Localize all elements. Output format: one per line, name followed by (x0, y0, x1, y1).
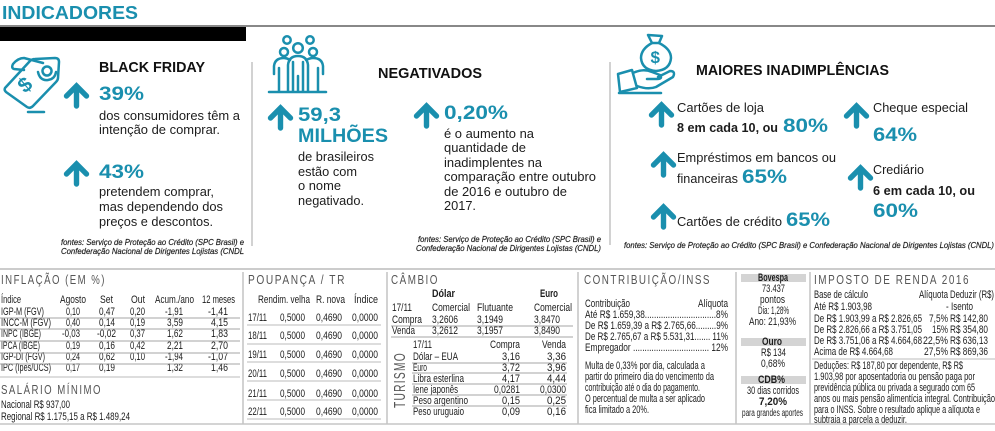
table: câmbio comercial: 3,2606 (432, 314, 458, 326)
item: cartões de loja: 80% (783, 116, 828, 137)
table rows: 0,19 (66, 340, 80, 352)
text: 0,20% description: inadimplentes na (444, 155, 543, 170)
text: multa note: partir do primeiro dia do vencimento da (585, 371, 714, 383)
arrow: up 0,20% (416, 106, 436, 126)
table rows: IGP-M (FGV) (1, 306, 44, 318)
source note: fontes: Serviço de Proteção ao Crédito (SPC Brasil) e (418, 234, 601, 244)
table rows (1, 306, 228, 374)
table: turismo: 0,0300 (540, 384, 566, 396)
table rows: 19/11 (248, 349, 267, 361)
table rows: 0,20 (130, 306, 145, 318)
panel: contribuição inss (584, 272, 729, 416)
table rows: 0,40 (66, 317, 80, 329)
table: alíquotas (585, 298, 729, 354)
table rows: 0,17 (66, 362, 80, 374)
table rows: IPC (Ipes/UCS) (1, 362, 51, 374)
table: turismo: 0,09 (502, 406, 520, 418)
table: alíquotas ir: 22,5% (923, 335, 948, 347)
table: alíquotas ir: De R$ 3.751,06 a R$ 4.664,68 (814, 335, 922, 347)
table rows: 0,10 (130, 351, 145, 363)
table rows: 0,5000 (280, 406, 305, 418)
text: multa note (585, 360, 714, 416)
table header (1, 293, 235, 306)
text: 0,20% description (444, 126, 596, 213)
table rows: -1,94 (165, 351, 183, 363)
item: cartões de crédito: Cartões de crédito (677, 214, 782, 229)
block: ouro (741, 336, 806, 370)
table header: Out (131, 294, 146, 306)
text: multa note: contribuição até o dia do pagamento. (585, 382, 700, 394)
table rows: 2,70 (211, 340, 228, 352)
table: câmbio comercial: Euro (540, 288, 558, 300)
text: 0,20% description: de 2016 e outubro de (444, 184, 567, 199)
item: cartões de loja: Cartões de loja (677, 100, 765, 115)
heading: poupança: POUPANÇA / TR (248, 272, 346, 287)
table rows: 0,62 (99, 351, 115, 363)
table: turismo: Venda (542, 339, 567, 351)
text: salário values: Regional R$ 1.175,15 a R$ 1.489,24 (1, 411, 130, 423)
table: turismo: 0,15 (502, 395, 520, 407)
text: 43% description (99, 184, 223, 229)
table rows: 0,0000 (352, 368, 378, 380)
heading: inflação: INFLAÇÃO (EM %) (1, 272, 106, 287)
item: cartões de loja (652, 100, 828, 137)
text: multa note: fica limitado a 20%. (585, 404, 649, 416)
text: 39% description: intenção de comprar. (99, 122, 220, 137)
icon: group of people (269, 36, 326, 92)
item: crediário (850, 162, 975, 222)
block: ouro: R$ 134 (761, 347, 786, 359)
table rows: 0,14 (99, 317, 115, 329)
table header: Rendim. velha (258, 294, 311, 306)
text: 43% description: mas dependendo dos (99, 199, 223, 214)
table: câmbio comercial: 3,1949 (477, 314, 503, 326)
table header: Índice (354, 293, 378, 306)
arrow: up 43% (66, 164, 86, 184)
table: turismo: Libra esterlina (413, 373, 465, 385)
item: empréstimos: Empréstimos em bancos ou (677, 150, 836, 165)
heading: salário mínimo: SALÁRIO MÍNIMO (1, 382, 102, 397)
arrow: up 39% (66, 86, 86, 106)
table: turismo: 3,16 (502, 351, 520, 363)
icon: hand holding money bag: $ (650, 48, 660, 67)
table: alíquotas: De R$ 2.765,67 a R$ 5.531,31....... 11% (585, 331, 728, 343)
table header: Agosto (60, 294, 86, 306)
table rows: 0,4690 (316, 330, 342, 342)
table rows: 0,0000 (352, 406, 378, 418)
block: bovespa (741, 272, 806, 328)
table rows (248, 312, 378, 418)
table: câmbio comercial: 3,1957 (477, 325, 503, 337)
item: crediário: Crediário (873, 162, 924, 177)
panel: imposto de renda (812, 272, 995, 426)
table rows: INCC-M (FGV) (1, 317, 51, 329)
panel: negativados (269, 36, 601, 253)
block: cdb: CDB% (758, 374, 785, 386)
table: câmbio comercial: Flutuante (477, 302, 513, 314)
table header: 12 meses (202, 294, 235, 306)
table: alíquotas ir (814, 289, 994, 358)
text: 0,20% description: comparação entre outubro (444, 169, 596, 184)
text: 43% description: pretendem comprar, (99, 184, 214, 199)
item: crediário: 6 em cada 10, ou (873, 183, 975, 198)
text: 0,20% description: 2017. (444, 198, 476, 213)
table: alíquotas ir: Base de cálculo (814, 289, 868, 301)
table: câmbio comercial (392, 288, 572, 337)
table: câmbio comercial: 3,8490 (534, 325, 560, 337)
table: câmbio comercial: Comercial (432, 302, 470, 314)
table: câmbio comercial: Compra (392, 314, 423, 326)
stat: 59,3 milhões: 59,3 (298, 105, 341, 126)
text: salário values: Nacional R$ 937,00 (1, 399, 70, 411)
item: cheque especial: Cheque especial (873, 100, 968, 115)
block: ouro: Ouro (762, 336, 782, 348)
table: turismo: 3,96 (547, 362, 566, 374)
table: câmbio comercial: 3,2612 (432, 325, 458, 337)
source note: Confederação Nacional de Dirigentes Lojistas (CNDL) (416, 243, 601, 253)
block: bovespa: Dia: 1,28% (758, 305, 789, 317)
table header (258, 293, 378, 306)
item: cartões de loja: 8 em cada 10, ou (677, 120, 778, 135)
label: turismo: TURISMO (392, 352, 409, 408)
table rows: 0,0000 (352, 312, 378, 324)
table: alíquotas ir: Acima de R$ 4.664,68 (814, 346, 893, 358)
table rows: 3,59 (167, 317, 183, 329)
table rows: 0,42 (130, 340, 145, 352)
table: alíquotas ir: Até R$ 1.903,98 (814, 301, 872, 313)
text: 39% description: dos consumidores têm a (99, 108, 241, 123)
table rows: 1,46 (211, 362, 228, 374)
table rows: -1,91 (165, 306, 183, 318)
table rows: 0,0000 (352, 388, 378, 400)
table rows: 0,24 (66, 351, 80, 363)
stat: 43%: 43% (99, 162, 144, 183)
table: turismo: Euro (413, 362, 427, 374)
table: turismo: 0,25 (547, 395, 566, 407)
heading: contribuição: CONTRIBUIÇÃO/INSS (584, 272, 711, 287)
item: empréstimos (654, 150, 836, 188)
table rows: 0,0000 (352, 330, 378, 342)
table: turismo: Peso argentino (413, 395, 468, 407)
table rows: IPCA (IBGE) (1, 340, 40, 352)
item: cartões de crédito (654, 207, 830, 231)
table rows: 0,5000 (280, 312, 305, 324)
block: cdb: para grandes aportes (742, 408, 803, 419)
table: turismo: Dólar – EUA (413, 351, 458, 363)
text: multa note: O percentual de multa a ser aplicado (585, 393, 705, 405)
heading: black friday: BLACK FRIDAY (99, 59, 205, 76)
table rows: IGP-DI (FGV) (1, 351, 45, 363)
text: salário values (1, 399, 130, 423)
table rows: 0,5000 (280, 388, 305, 400)
text: deduções note: subtraia a parcela a deduzir. (814, 414, 907, 426)
block: cdb: 30 dias corridos (747, 385, 799, 397)
table: turismo: Peso uruguaio (413, 406, 464, 418)
text: brasileiros: negativado. (298, 193, 364, 208)
table: alíquotas: Até R$ 1.659,38...............................8% (585, 309, 728, 321)
table rows: 0,4690 (316, 406, 342, 418)
source note: Confederação Nacional de Dirigentes Lojistas (CNDL (61, 246, 244, 256)
table rows: -1,41 (208, 306, 228, 318)
icon: price tag (5, 58, 59, 112)
text: 0,20% description: quantidade de (444, 140, 526, 155)
table rows: 0,10 (66, 306, 80, 318)
table header: Set (100, 294, 114, 306)
panel: poupança table (247, 272, 381, 419)
item: cartões de crédito: 65% (786, 210, 830, 231)
text: deduções note (814, 360, 995, 426)
table rows: 4,15 (211, 317, 228, 329)
item: empréstimos: 65% (742, 167, 787, 188)
panel: maiores inadimplências (618, 35, 994, 250)
table: turismo: Iene japonês (413, 384, 458, 396)
block: bovespa: Bovespa (758, 272, 788, 284)
table rows: -0,03 (62, 328, 80, 340)
stat: 59,3 milhões (298, 105, 388, 147)
block: cdb: 7,20% (759, 396, 787, 408)
table rows: -1,07 (208, 351, 228, 363)
table: alíquotas ir: De R$ 2.826,66 a R$ 3.751,05 (814, 324, 922, 336)
block: ouro: 0,68% (761, 358, 785, 370)
table rows: 1,32 (167, 362, 183, 374)
table: câmbio comercial: Dólar (432, 288, 455, 300)
block: cdb (741, 374, 806, 419)
table: alíquotas: Contribuição (585, 298, 630, 310)
table: alíquotas ir: 15% (932, 324, 948, 336)
panel: câmbio (391, 272, 573, 418)
table rows: INPC (IBGE) (1, 328, 41, 340)
text: 0,20% description: é o aumento na (444, 126, 535, 141)
table: alíquotas: De R$ 1.659,39 a R$ 2.765,66.........9% (585, 320, 728, 332)
heading: câmbio: CÂMBIO (391, 272, 439, 287)
panel: bovespa ouro cdb (741, 272, 806, 419)
table rows: 0,0000 (352, 349, 378, 361)
table rows: 21/11 (248, 388, 267, 400)
table rows: 0,4690 (316, 312, 342, 324)
text: multa note: Multa de 0,33% por dia, calculada a (585, 360, 705, 372)
table rows: 0,19 (130, 317, 145, 329)
table rows: -0,02 (97, 328, 116, 340)
table rows: 0,4690 (316, 388, 342, 400)
table rows: 0,5000 (280, 349, 305, 361)
source note (416, 234, 601, 253)
table rows: 1,62 (167, 328, 183, 340)
block: bovespa: Ano: 21,93% (749, 316, 796, 328)
table rows: 1,83 (211, 328, 228, 340)
table rows: 0,47 (99, 306, 115, 318)
table header: R. nova (316, 294, 346, 306)
table rows: 0,37 (130, 328, 145, 340)
table: alíquotas ir: Alíquota (919, 289, 948, 301)
panel: inflação table (0, 272, 240, 423)
table: alíquotas ir: De R$ 1.903,99 a R$ 2.826,65 (814, 313, 922, 325)
table: alíquotas: Empregador ................................. 12% (585, 342, 728, 354)
table rows: 0,19 (99, 362, 115, 374)
stat: 0,20%: 0,20% (444, 103, 508, 124)
stat: 39%: 39% (99, 84, 144, 105)
source note: fontes: Serviço de Proteção ao Crédito (SPC Brasil) e (61, 237, 244, 247)
table: turismo: Compra (490, 339, 521, 351)
table rows: 20/11 (248, 368, 267, 380)
block: bovespa: 73.437 (762, 283, 785, 295)
table: câmbio comercial: 3,8470 (534, 314, 560, 326)
text: 39% description (99, 108, 241, 137)
heading: maiores inadimplências: MAIORES INADIMPLÊNCIAS (696, 61, 889, 79)
arrow: up 59,3 (270, 108, 290, 128)
table rows: 22/11 (248, 406, 267, 418)
table rows: 2,21 (167, 340, 183, 352)
table: turismo: 17/11 (413, 339, 432, 351)
table: turismo: 0,16 (547, 406, 566, 418)
table: turismo (413, 339, 567, 418)
table header: Acum./ano (155, 294, 194, 306)
table rows: 0,16 (99, 340, 115, 352)
table: turismo: 4,44 (547, 373, 566, 385)
table: turismo: 0,0281 (494, 384, 520, 396)
table: alíquotas ir: 27,5% (924, 346, 948, 358)
item: crediário: 60% (873, 201, 918, 222)
table rows: 17/11 (248, 312, 267, 324)
black header bar (0, 27, 246, 41)
table: alíquotas: Alíquota (698, 298, 729, 310)
item: cheque especial (846, 100, 968, 146)
table rows: 0,5000 (280, 368, 305, 380)
table: turismo: 3,72 (502, 362, 520, 374)
block: bovespa: pontos (760, 294, 785, 306)
table rows: 0,4690 (316, 368, 342, 380)
text: 43% description: preços e descontos. (99, 214, 213, 229)
text: brasileiros: o nome (298, 178, 341, 193)
table: turismo: 4,17 (502, 373, 520, 385)
heading: negativados: NEGATIVADOS (378, 65, 482, 82)
source note (61, 237, 244, 256)
table: câmbio comercial: 17/11 (392, 302, 412, 314)
table header: Índice (1, 293, 21, 306)
table: turismo: 3,36 (547, 351, 566, 363)
table: alíquotas ir: - Isento (946, 301, 973, 313)
text: brasileiros: de brasileiros (298, 149, 374, 164)
item: cheque especial: 64% (873, 125, 917, 146)
table rows: 0,5000 (280, 330, 305, 342)
table: alíquotas ir: 7,5% (929, 313, 948, 325)
icon: hand holding money bag (618, 35, 674, 93)
stat: 59,3 milhões: MILHÕES (298, 125, 388, 147)
title: INDICADORES (2, 3, 138, 23)
icon: price tag: $ (13, 72, 37, 98)
text: brasileiros (298, 149, 374, 208)
text: brasileiros: estão com (298, 164, 357, 179)
table: câmbio comercial: Comercial (534, 302, 572, 314)
panel: black friday (5, 58, 244, 256)
table rows: 0,4690 (316, 349, 342, 361)
item: empréstimos: financeiras (677, 171, 738, 186)
table: câmbio comercial: Venda (392, 325, 416, 337)
table rows: 18/11 (248, 330, 267, 342)
